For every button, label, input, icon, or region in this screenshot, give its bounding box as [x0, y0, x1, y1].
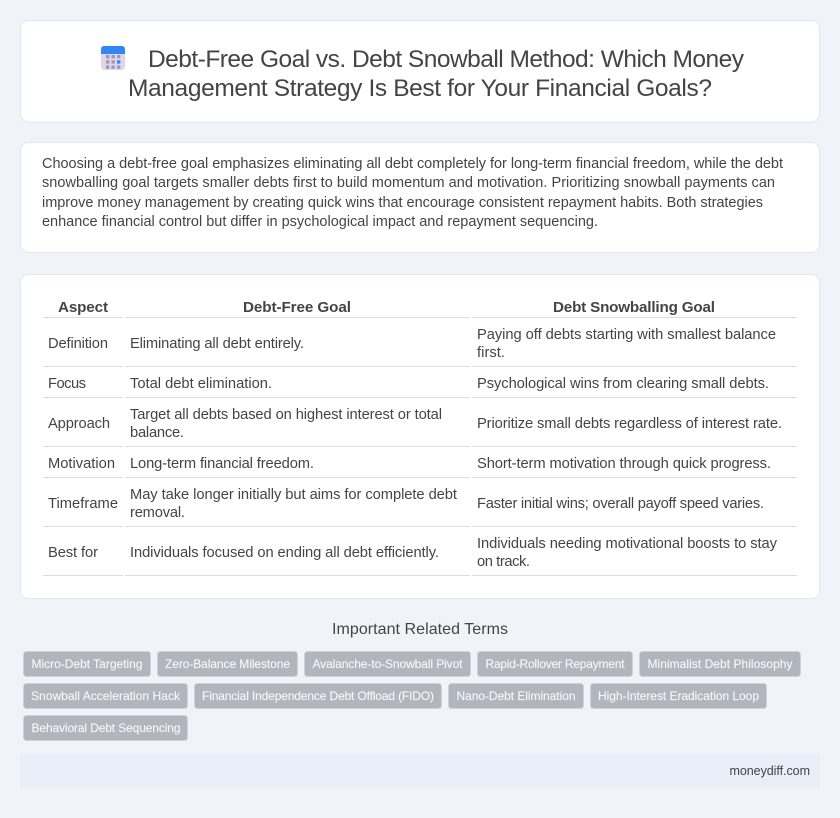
row: focus: Focus	[48, 376, 86, 392]
row: approach: balance.	[130, 425, 184, 441]
row: definition	[48, 327, 776, 361]
row: definition: Definition	[48, 336, 108, 352]
title: Management Strategy Is Best for Your Financial Goals?	[128, 75, 712, 102]
chip: Rapid-Rollover Repayment	[486, 657, 625, 671]
text block: introduction paragraph: snowballing goal targets smaller debts first to build momentum and motivation. Prioritizing snowball payments can	[42, 175, 775, 191]
chip: Snowball Acceleration Hack	[31, 689, 181, 703]
row: definition: Eliminating all debt entirely.	[130, 336, 304, 352]
footer	[20, 754, 820, 788]
chip: Behavioral Debt Sequencing	[32, 721, 180, 735]
table header: Aspect	[58, 299, 108, 316]
icon: calendar	[101, 46, 125, 70]
chip	[478, 652, 632, 676]
row: motivation: Short-term motivation through quick progress.	[477, 456, 771, 472]
row: timeframe: May take longer initially but aims for complete debt	[130, 487, 457, 503]
row: best for: Individuals needing motivational boosts to stay	[477, 536, 778, 552]
chip: Minimalist Debt Philosophy	[648, 657, 792, 671]
table header: Debt-Free Goal	[243, 299, 351, 316]
chip	[194, 684, 442, 708]
row: definition: first.	[477, 345, 505, 361]
row: definition: Paying off debts starting with smallest balance	[477, 327, 776, 343]
row: best for: Best for	[48, 545, 98, 561]
chip	[304, 652, 470, 676]
chip	[640, 652, 800, 676]
row: focus: Total debt elimination.	[130, 376, 272, 392]
chip	[448, 684, 584, 708]
row: timeframe: Faster initial wins; overall payoff speed varies.	[477, 496, 764, 512]
row: best for: on track.	[477, 554, 530, 570]
row: timeframe	[48, 487, 764, 521]
heading: related terms: Important Related Terms	[332, 621, 508, 638]
row: timeframe: Timeframe	[48, 496, 118, 512]
chip	[590, 684, 766, 708]
text block: introduction paragraph: improve money management by creating quick wins that encourage consistent repayment habits. Both strategies	[42, 195, 763, 211]
table header: Debt Snowballing Goal	[553, 299, 715, 316]
title	[128, 46, 745, 102]
footer source: moneydiff.com	[730, 764, 810, 778]
row: motivation: Motivation	[48, 456, 115, 472]
text block: introduction paragraph: enhance financial control but differ in psychological impact and repayment sequencing.	[42, 214, 598, 230]
row: motivation	[48, 456, 771, 472]
row: approach: Target all debts based on highest interest or total	[130, 407, 442, 423]
chip	[24, 684, 188, 708]
chip: Nano-Debt Elimination	[456, 689, 576, 703]
row: approach: Approach	[48, 416, 110, 432]
row: best for: Individuals focused on ending all debt efficiently.	[130, 545, 439, 561]
row: focus	[48, 376, 769, 392]
row: timeframe: removal.	[130, 505, 185, 521]
row: best for	[48, 536, 778, 570]
related terms chips	[24, 652, 800, 740]
text block: introduction paragraph: Choosing a debt-free goal emphasizes eliminating all debt completely for long-term financial freedom, while the debt	[42, 156, 783, 172]
table header	[58, 299, 715, 316]
row: approach: Prioritize small debts regardless of interest rate.	[477, 416, 782, 432]
chip: Zero-Balance Milestone	[165, 657, 290, 671]
panel: introduction	[20, 142, 820, 252]
row: approach	[48, 407, 782, 441]
chip: High-Interest Eradication Loop	[598, 689, 759, 703]
chip: Micro-Debt Targeting	[32, 657, 142, 671]
chip: Avalanche-to-Snowball Pivot	[312, 657, 463, 671]
chip	[158, 652, 298, 676]
title: Debt-Free Goal vs. Debt Snowball Method: Which Money	[148, 46, 745, 73]
chip: Financial Independence Debt Offload (FIDO)	[202, 689, 434, 703]
chip	[24, 652, 150, 676]
row: focus: Psychological wins from clearing small debts.	[477, 376, 769, 392]
panel: title card	[20, 20, 820, 122]
panel: comparison table	[20, 274, 820, 598]
row: motivation: Long-term financial freedom.	[130, 456, 314, 472]
chip	[24, 716, 188, 740]
text block: introduction paragraph	[42, 156, 783, 230]
